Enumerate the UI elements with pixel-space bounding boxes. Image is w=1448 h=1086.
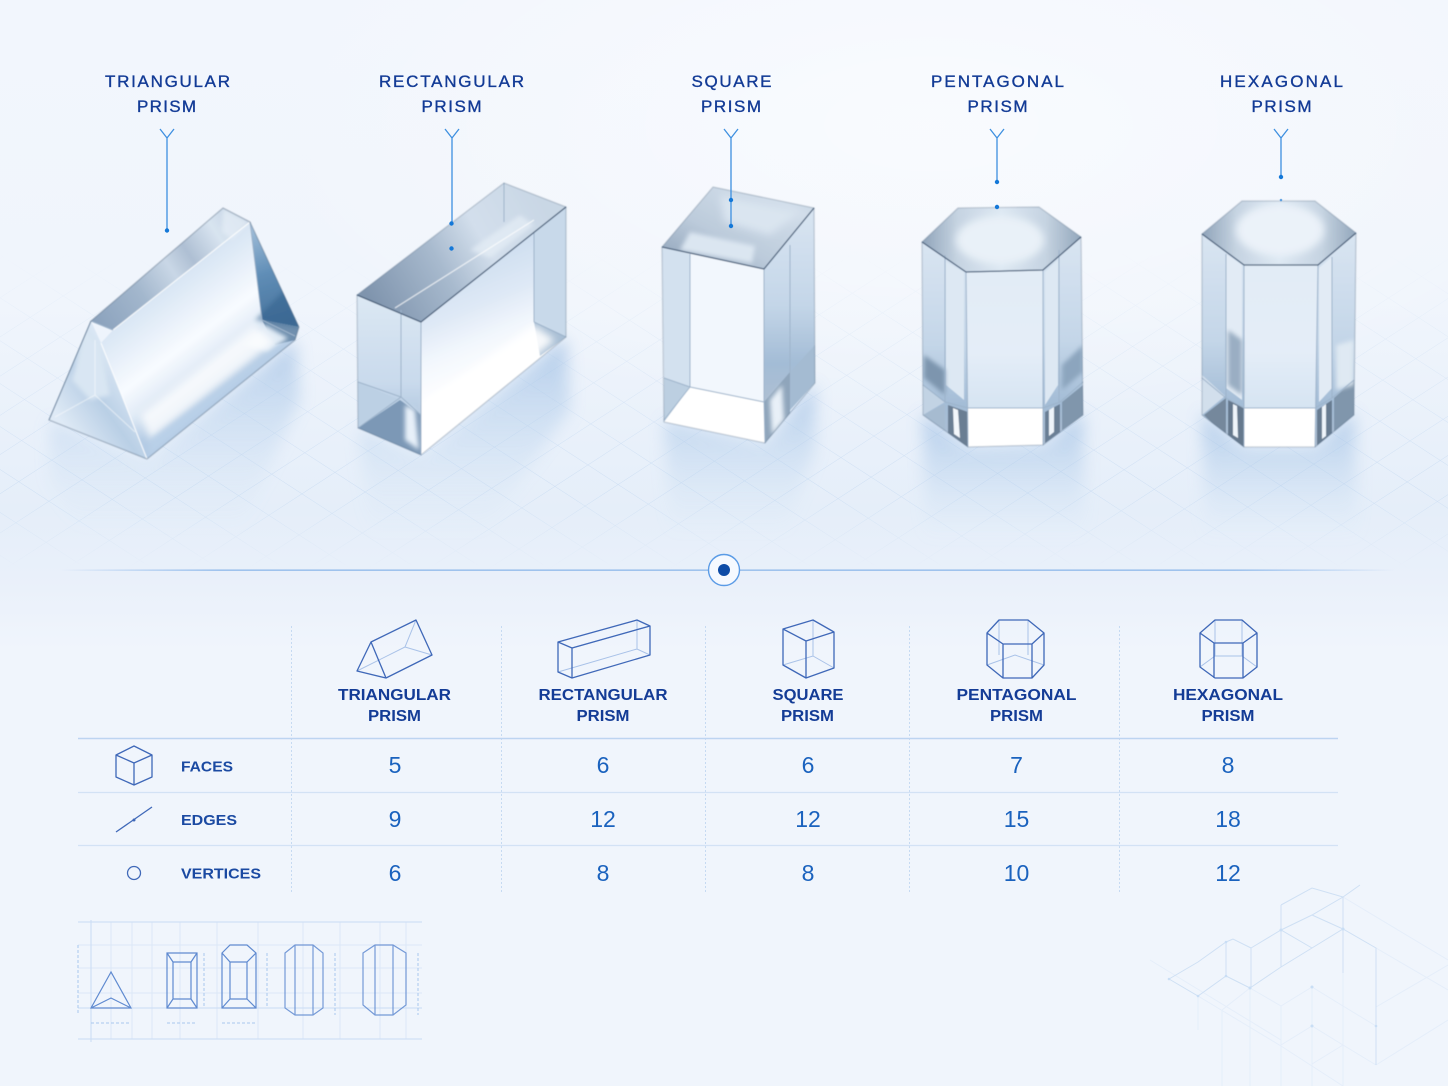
- drawing: triangle: [91, 972, 131, 1008]
- leader: hexagonal prism: [1274, 129, 1288, 201]
- row: vertices: VERTICES: [181, 866, 261, 882]
- label: hexagonal prism: HEXAGONAL: [1220, 72, 1343, 91]
- icon: pentagonal prism: [987, 620, 1044, 678]
- label: square prism: SQUARE: [692, 72, 772, 91]
- label: pentagonal prism: PENTAGONAL: [931, 72, 1064, 91]
- icon: cube: [116, 746, 152, 785]
- leader: triangular prism: [160, 129, 174, 233]
- label: rectangular prism: [379, 72, 524, 116]
- row: edges: [116, 806, 1241, 832]
- isometric wireframe: [1150, 885, 1448, 1086]
- header: hexagonal prism: PRISM: [1202, 708, 1254, 725]
- glass prism: rectangular: [357, 183, 566, 455]
- row: faces: 7: [1010, 752, 1023, 778]
- blueprint sketch: [78, 920, 422, 1042]
- header: rectangular prism: [538, 687, 668, 725]
- row: edges: 15: [1004, 806, 1029, 832]
- header: square prism: SQUARE: [772, 687, 844, 704]
- label: square prism: PRISM: [701, 97, 761, 116]
- floor reflections: [50, 337, 1358, 540]
- header: square prism: PRISM: [781, 708, 834, 725]
- header: pentagonal prism: PENTAGONAL: [956, 687, 1077, 704]
- label: hexagonal prism: PRISM: [1252, 97, 1312, 116]
- drawing: rectangle: [167, 953, 197, 1008]
- label: rectangular prism: RECTANGULAR: [379, 72, 524, 91]
- drawing: pentagon: [285, 945, 323, 1015]
- glass prism: square: [662, 187, 815, 443]
- icon: triangular prism: [357, 620, 432, 678]
- leader: pentagonal prism: [990, 129, 1004, 209]
- row: edges: 9: [389, 806, 401, 832]
- icon: square prism: [783, 620, 834, 678]
- divider with centre marker: [60, 554, 1395, 586]
- header: pentagonal prism: [956, 687, 1077, 725]
- row: vertices: 12: [1215, 860, 1241, 886]
- drawing: hexagon: [363, 945, 406, 1015]
- row: faces: [116, 746, 1234, 785]
- header: rectangular prism: RECTANGULAR: [538, 687, 668, 704]
- row: edges: 12: [590, 806, 616, 832]
- row: vertices: [128, 860, 1241, 886]
- glass prism: hexagonal: [1202, 201, 1356, 447]
- row: vertices: 8: [802, 860, 814, 886]
- row: faces: 8: [1222, 752, 1234, 778]
- comparison table: [78, 620, 1338, 893]
- label: triangular prism: [105, 72, 230, 116]
- header: triangular prism: [338, 687, 451, 725]
- row: edges: 18: [1215, 806, 1241, 832]
- icon: edge: [116, 807, 152, 832]
- label: rectangular prism: PRISM: [422, 97, 482, 116]
- label: triangular prism: PRISM: [137, 97, 196, 116]
- row: vertices: 6: [389, 860, 401, 886]
- row: vertices: 10: [1004, 860, 1029, 886]
- icon: hexagonal prism: [1200, 620, 1257, 678]
- icon: rectangular prism: [558, 620, 650, 678]
- row: edges: 12: [795, 806, 821, 832]
- glass prism: pentagonal: [922, 207, 1083, 447]
- header: pentagonal prism: PRISM: [990, 708, 1043, 725]
- header: triangular prism: TRIANGULAR: [338, 687, 451, 704]
- leader: rectangular prism: [445, 129, 459, 251]
- header: hexagonal prism: [1173, 687, 1283, 725]
- label: pentagonal prism: PRISM: [968, 97, 1028, 116]
- row: faces: 6: [802, 752, 814, 778]
- row: edges: EDGES: [181, 812, 237, 829]
- label: hexagonal prism: [1220, 72, 1343, 116]
- glass prism: triangular: [49, 208, 299, 459]
- row: vertices: 8: [597, 860, 609, 886]
- leader: square prism: [724, 129, 738, 228]
- header: rectangular prism: PRISM: [576, 708, 630, 725]
- header: square prism: [772, 687, 844, 725]
- icon: vertex: [128, 866, 140, 880]
- label: triangular prism: TRIANGULAR: [105, 72, 230, 91]
- header: triangular prism: PRISM: [368, 708, 421, 725]
- row: faces: FACES: [181, 758, 233, 776]
- row: faces: 6: [597, 752, 609, 778]
- label: square prism: [692, 72, 772, 116]
- label: pentagonal prism: [931, 72, 1064, 116]
- header: hexagonal prism: HEXAGONAL: [1173, 687, 1283, 704]
- row: faces: 5: [389, 752, 401, 778]
- drawing: square: [222, 945, 256, 1008]
